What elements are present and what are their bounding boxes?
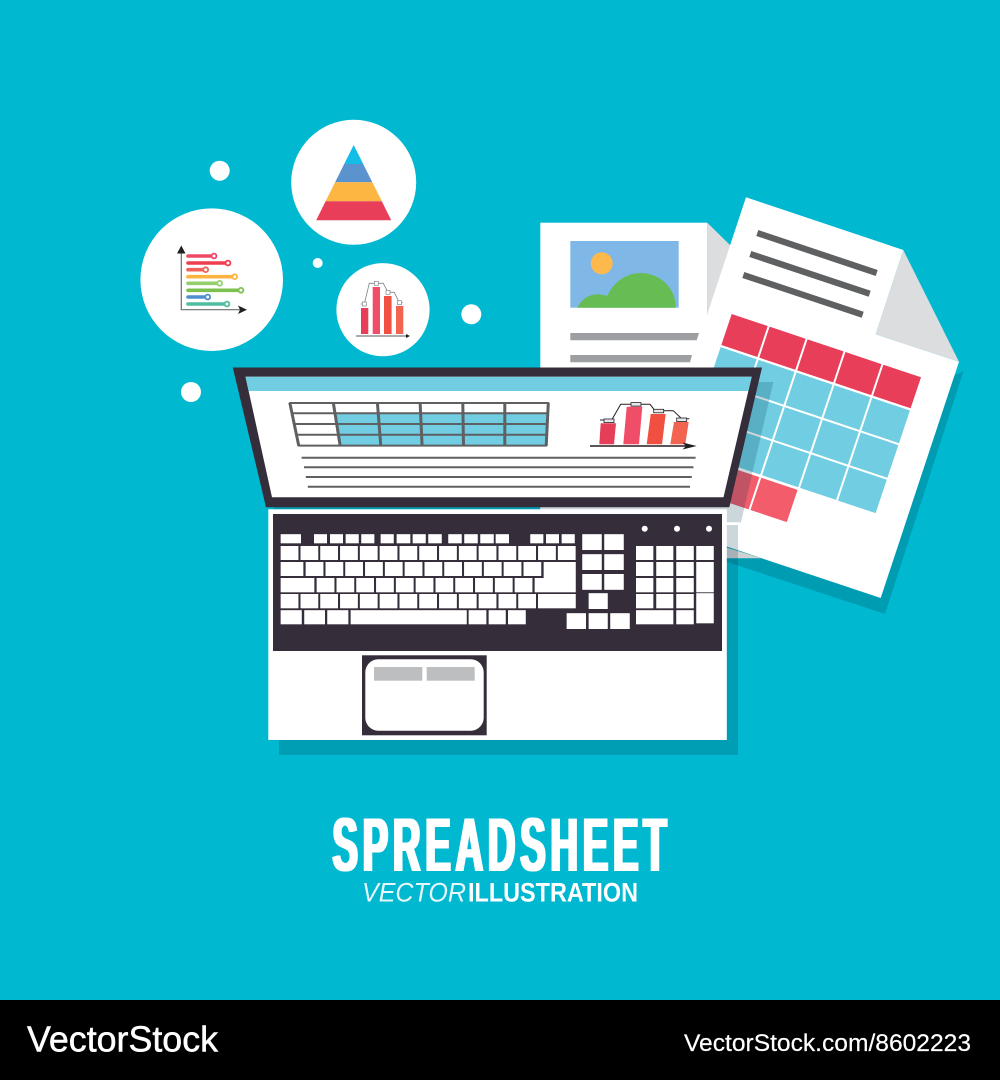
footer brand: VectorStock [27, 1019, 219, 1060]
document heading lines [742, 230, 878, 318]
subtitle [362, 878, 638, 908]
subtitle: VECTOR [362, 878, 466, 908]
icon: pyramid chart bubble [291, 120, 416, 245]
on-screen bar chart [590, 403, 697, 450]
picture placeholder [570, 241, 679, 308]
laptop base [268, 509, 727, 740]
keyboard [273, 514, 722, 651]
footer image id: VectorStock.com/8602223 [684, 1030, 971, 1057]
touchpad [362, 655, 487, 735]
document with picture [540, 223, 745, 523]
light grey sheet edge below document [720, 546, 762, 558]
spreadsheet document [640, 197, 959, 598]
subtitle: ILLUSTRATION [468, 878, 638, 908]
on-screen spreadsheet table [289, 403, 549, 446]
indicator lights [642, 526, 712, 532]
decorative bubbles [181, 161, 481, 402]
keyboard keys [281, 534, 714, 629]
laptop shadow [244, 382, 773, 755]
document shadow [700, 371, 964, 614]
table grid [675, 314, 921, 548]
laptop [233, 368, 762, 740]
icon: horizontal lollipop chart bubble [140, 208, 283, 351]
footer bar [0, 1000, 1000, 1080]
icon: bar chart bubble [336, 263, 430, 356]
on-screen text lines [302, 458, 696, 487]
laptop screen [233, 368, 762, 507]
title: SPREADSHEET [332, 803, 671, 887]
